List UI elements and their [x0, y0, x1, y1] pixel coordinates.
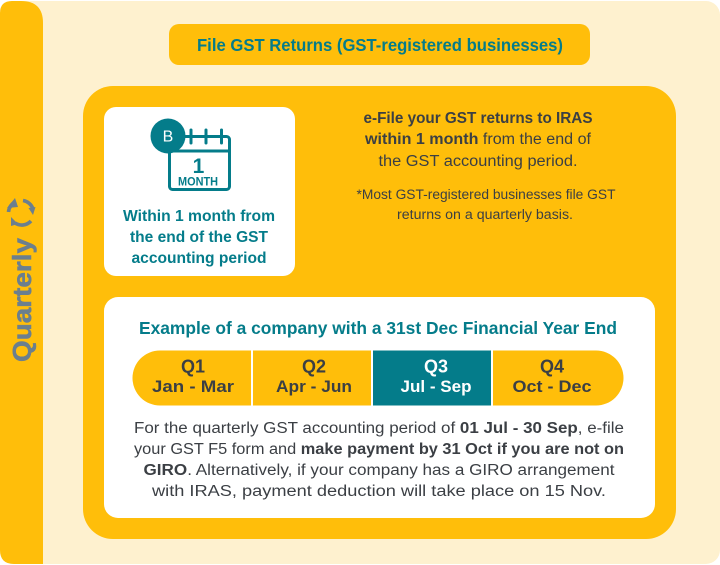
- text: deadline caption: [123, 208, 275, 267]
- segment: Q1: Jan - Mar: [152, 377, 234, 396]
- icon: calendar with B badge: 1: [193, 155, 205, 178]
- icon: calendar with B badge: B: [163, 128, 173, 146]
- text: example explanation: [134, 420, 624, 500]
- text: deadline caption: Within 1 month from: [123, 208, 275, 225]
- segment: Q2: Apr - Jun: [276, 377, 352, 396]
- icon: calendar with B badge: [150, 118, 230, 190]
- segment: Q3: [373, 350, 491, 406]
- text: e-file instruction: [364, 110, 592, 170]
- text: e-file instruction: e-File your GST returns to IRAS: [364, 110, 592, 127]
- card: deadline: [104, 107, 295, 276]
- text: footnote: [356, 187, 616, 222]
- icon: calendar with B badge: MONTH: [178, 176, 218, 188]
- text: deadline caption: accounting period: [132, 250, 266, 267]
- heading pill: File GST Returns: File GST Returns (GST-registered businesses): [197, 35, 563, 55]
- text: e-file instruction: the GST accounting period.: [378, 153, 578, 170]
- segment: Q2: Q2: [302, 356, 326, 376]
- segment: Q4: [493, 350, 623, 406]
- segment: Q2: [253, 350, 371, 406]
- segment: Q4: Oct - Dec: [512, 377, 592, 396]
- text: deadline caption: the end of the GST: [130, 229, 269, 246]
- text: example explanation: For the quarterly GST accounting period of 01 Jul - 30 Sep , e-file: [134, 420, 624, 437]
- heading pill: File GST Returns: [169, 24, 590, 65]
- text: e-file instruction: within 1 month from the end of: [364, 131, 592, 148]
- segment: Q4: Q4: [540, 356, 564, 376]
- label: Quarterly: Quarterly: [7, 237, 37, 362]
- segment: Q1: [132, 350, 251, 406]
- text: example explanation: GIRO . Alternatively, if your company has a GIRO arrangement: [144, 462, 615, 479]
- text: example explanation: with IRAS, payment deduction will take place on 15 Nov.: [151, 483, 606, 500]
- panel: main amber panel: [83, 86, 676, 539]
- text: footnote: *Most GST-registered businesses file GST: [356, 187, 616, 202]
- text: footnote: returns on a quarterly basis.: [397, 207, 573, 222]
- segment: Q3: Jul - Sep: [400, 377, 472, 396]
- text: example explanation: your GST F5 form and make payment by 31 Oct if you are not on: [134, 441, 624, 458]
- card: example: [104, 297, 655, 518]
- segment: Q1: Q1: [181, 356, 205, 376]
- segment: Q3: Q3: [424, 356, 448, 376]
- icon: refresh arrows: [7, 198, 36, 226]
- panel: quarterly side band: [0, 1, 43, 564]
- heading: example: Example of a company with a 31st Dec Financial Year End: [139, 318, 617, 338]
